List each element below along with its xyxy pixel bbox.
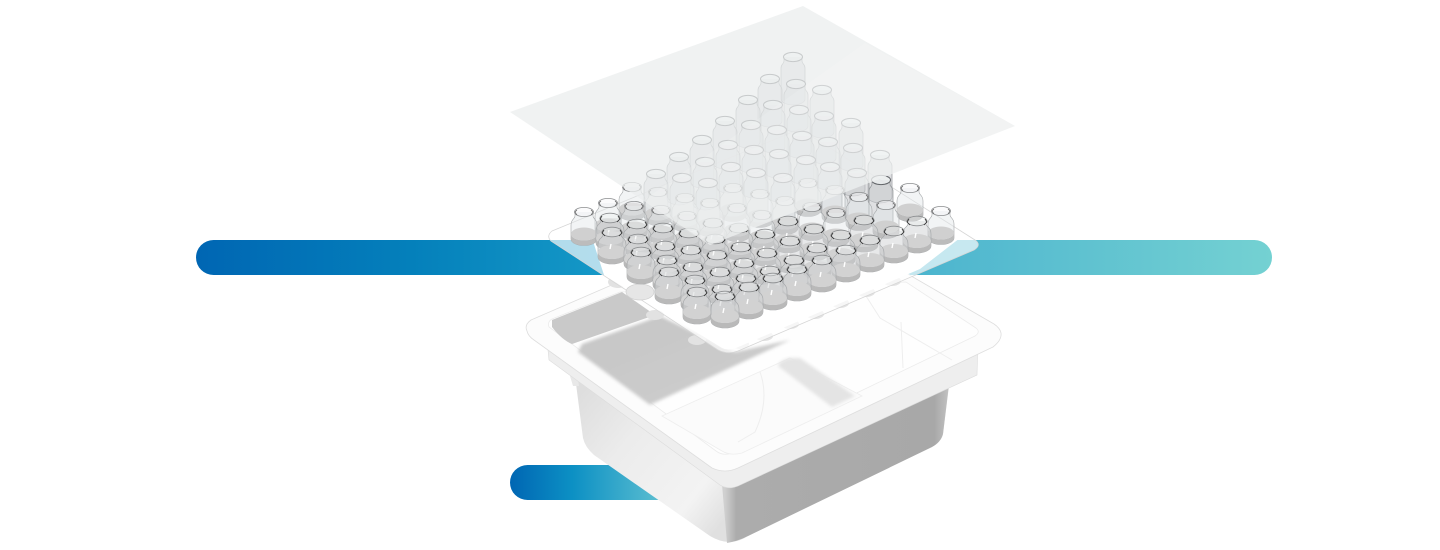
vial array — [571, 52, 954, 328]
gray shadow strip — [552, 292, 655, 344]
tub flange skirt — [547, 340, 978, 488]
sheet main — [510, 6, 1015, 245]
tub inner opening — [548, 282, 978, 454]
bar: short gradient band — [510, 465, 700, 500]
tub right face — [722, 376, 950, 543]
tub left face — [575, 376, 950, 542]
gray shadow area — [578, 316, 790, 405]
tub floor panel — [662, 358, 862, 454]
tub mesh label — [778, 358, 855, 407]
nest plate — [549, 129, 978, 353]
plate opaque center — [590, 135, 960, 350]
tub side notches — [570, 370, 957, 386]
plate empty corner hole — [626, 284, 654, 300]
protective film sheet — [510, 6, 1015, 245]
plate underside bumps — [608, 276, 901, 349]
plate translucent rim — [549, 129, 978, 353]
bar: wide gradient band — [196, 240, 1272, 275]
tub flange top — [526, 273, 1001, 471]
tub — [526, 273, 1001, 543]
tub wall highlights — [738, 296, 952, 442]
sheet light band — [640, 43, 1015, 245]
